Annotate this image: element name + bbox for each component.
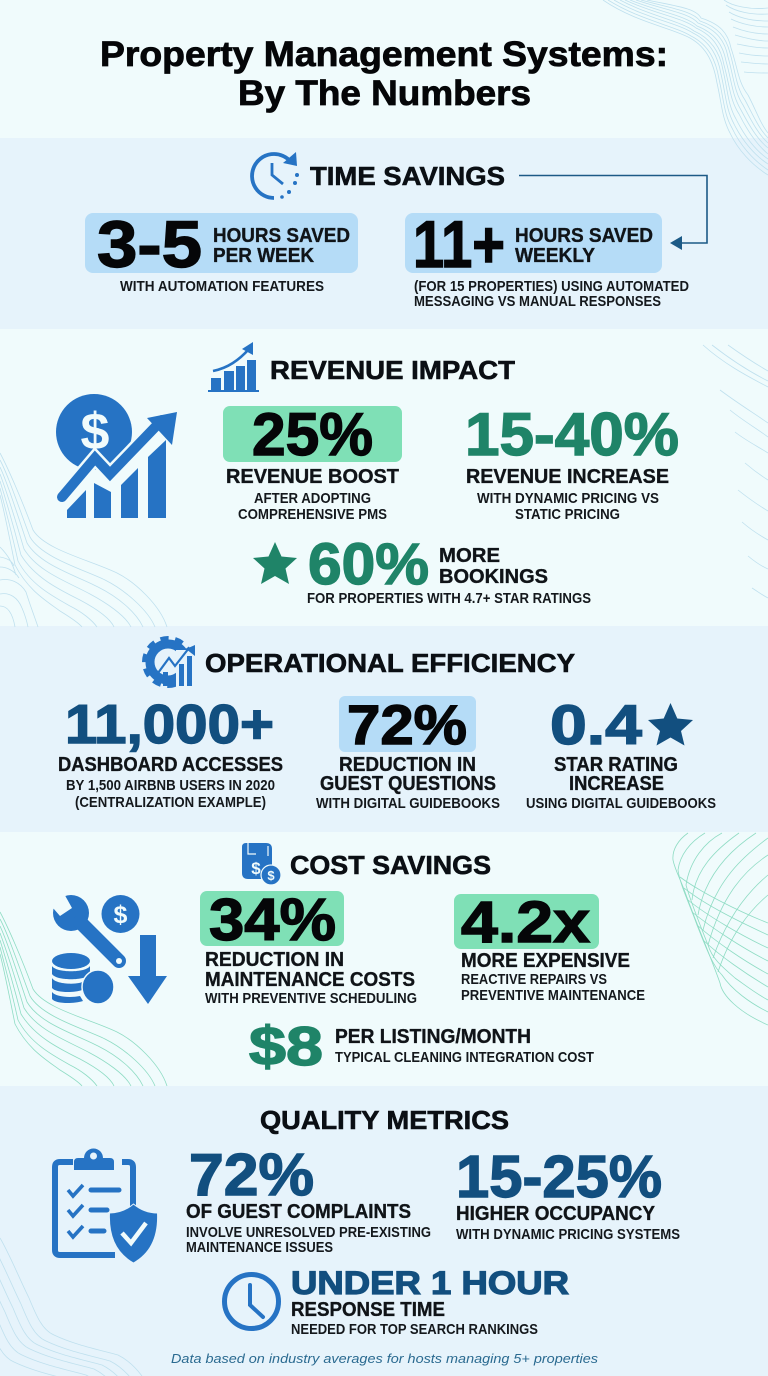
stat: 0.4 star rating increase: INCREASE: [569, 773, 664, 795]
stat: 11,000+ dashboard accesses: (CENTRALIZATION EXAMPLE): [75, 794, 266, 811]
stat: 34% reduction in maintenance costs: MAINTENANCE COSTS: [205, 969, 415, 991]
stat: 25% revenue boost: REVENUE BOOST: [226, 466, 399, 488]
arrow: heading to weekly stat: [519, 176, 707, 250]
heading: operational efficiency: OPERATIONAL EFFICIENCY: [205, 648, 575, 678]
panel: revenue impact: [56, 342, 679, 607]
stat: 0.4 star rating increase: [526, 693, 716, 812]
stat: 60% more bookings: BOOKINGS: [439, 566, 548, 588]
stat: 11,000+ dashboard accesses: DASHBOARD ACCESSES: [58, 754, 283, 776]
stat: 34% reduction in maintenance costs: 34%: [209, 887, 336, 953]
stat: 11+ hours saved: MESSAGING VS MANUAL RESPONSES: [414, 293, 661, 310]
stat: 72% of guest complaints: 72%: [189, 1142, 314, 1208]
icon: wrench, coins and down arrow: [46, 890, 167, 1004]
stat: 60% more bookings: MORE: [439, 545, 500, 567]
stat: 25% revenue boost: AFTER ADOPTING: [254, 490, 371, 507]
stat: 72% of guest complaints: MAINTENANCE ISSUES: [186, 1239, 333, 1256]
icon: clock: [224, 1274, 278, 1328]
icon: revenue chart with dollar coin: [56, 394, 177, 518]
stat: 11+ hours saved: HOURS SAVED: [515, 225, 653, 247]
stat: 72% of guest complaints: INVOLVE UNRESOLVED PRE-EXISTING: [186, 1224, 431, 1241]
stat: 15-40% revenue increase: WITH DYNAMIC PRICING VS: [477, 490, 659, 507]
stat: 4.2x more expensive: MORE EXPENSIVE: [461, 950, 630, 972]
stat: 60% more bookings: 60%: [308, 532, 429, 597]
stat: $8 per listing per month: TYPICAL CLEANING INTEGRATION COST: [335, 1049, 594, 1066]
stat: 4.2x more expensive: 4.2x: [461, 890, 590, 955]
stat: 11+ hours saved: 11+: [413, 207, 505, 281]
title: [100, 35, 668, 113]
stat: under 1 hour response time: [224, 1265, 569, 1338]
title: Property Management Systems:: [100, 35, 668, 74]
stat: 11+ hours saved: [405, 207, 689, 310]
stat: 60% more bookings: [253, 532, 591, 607]
stat: 25% revenue boost: 25%: [252, 401, 373, 468]
icon: clock with arrow: [252, 152, 299, 199]
icon: revenue chart with dollar coin: $: [81, 403, 110, 461]
stat: 4.2x more expensive: PREVENTIVE MAINTENANCE: [461, 987, 645, 1004]
panel: quality metrics: [55, 1105, 680, 1338]
heading: quality metrics: QUALITY METRICS: [260, 1105, 509, 1135]
stat: 0.4 star rating increase: STAR RATING: [554, 754, 678, 776]
stat: 11,000+ dashboard accesses: BY 1,500 AIRBNB USERS IN 2020: [66, 777, 275, 794]
stat: 11,000+ dashboard accesses: 11,000+: [65, 693, 274, 755]
stat: 34% reduction in maintenance costs: [200, 887, 417, 1007]
footer note: Data based on industry averages for hosts managing 5+ properties: [171, 1351, 599, 1366]
stat: 4.2x more expensive: REACTIVE REPAIRS VS: [461, 971, 607, 988]
heading: cost savings: COST SAVINGS: [290, 850, 491, 880]
stat: 15-25% higher occupancy: 15-25%: [456, 1144, 662, 1210]
stat: 25% revenue boost: [223, 401, 402, 523]
stat: 3-5 hours saved: 3-5: [97, 207, 202, 281]
heading: time savings: TIME SAVINGS: [310, 161, 505, 191]
stat: 0.4 star rating increase: USING DIGITAL GUIDEBOOKS: [526, 795, 716, 812]
stat: 72% of guest complaints: [186, 1142, 431, 1256]
panel: time savings: [85, 152, 707, 310]
stat: 72% reduction in guest questions: WITH DIGITAL GUIDEBOOKS: [316, 795, 500, 812]
title: By The Numbers: [238, 74, 531, 113]
stat: 72% reduction in guest questions: REDUCTION IN: [339, 754, 476, 776]
stat: 15-25% higher occupancy: [456, 1144, 680, 1243]
heading: revenue impact: REVENUE IMPACT: [270, 355, 515, 385]
stat: 34% reduction in maintenance costs: WITH PREVENTIVE SCHEDULING: [205, 990, 417, 1007]
stat: 3-5 hours saved: WITH AUTOMATION FEATURES: [120, 278, 324, 295]
stat: 15-40% revenue increase: REVENUE INCREASE: [466, 466, 669, 488]
stat: 72% reduction in guest questions: GUEST QUESTIONS: [320, 773, 496, 795]
stat: 15-25% higher occupancy: WITH DYNAMIC PRICING SYSTEMS: [456, 1226, 680, 1243]
icon: wrench, coins and down arrow: $: [114, 901, 128, 929]
icon: bill with dollar coin: $: [267, 868, 275, 883]
stat: 11+ hours saved: WEEKLY: [515, 245, 596, 267]
stat: 15-40% revenue increase: [465, 401, 679, 523]
stat: 25% revenue boost: COMPREHENSIVE PMS: [238, 506, 387, 523]
stat: $8 per listing per month: PER LISTING/MONTH: [335, 1026, 531, 1048]
stat: 3-5 hours saved: HOURS SAVED: [213, 225, 350, 247]
stat: under 1 hour response time: UNDER 1 HOUR: [291, 1265, 569, 1301]
stat: 15-40% revenue increase: 15-40%: [465, 401, 679, 468]
panel: cost savings: [46, 843, 645, 1077]
icon: clipboard with shield: [55, 1148, 158, 1263]
stat: 11+ hours saved: (FOR 15 PROPERTIES) USING AUTOMATED: [414, 278, 689, 295]
icon: gear with chart: [145, 639, 200, 688]
stat: 4.2x more expensive: [454, 890, 645, 1004]
stat: 11,000+ dashboard accesses: [58, 693, 283, 811]
icon: bill with dollar coin: $: [251, 859, 261, 878]
stat: 72% of guest complaints: OF GUEST COMPLAINTS: [186, 1201, 411, 1223]
panel: operational efficiency: [58, 639, 716, 812]
icon: small bar chart: [208, 342, 259, 392]
stat: 15-25% higher occupancy: HIGHER OCCUPANCY: [456, 1203, 656, 1225]
stat: 15-40% revenue increase: STATIC PRICING: [515, 506, 620, 523]
stat: 3-5 hours saved: PER WEEK: [213, 245, 315, 267]
stat: under 1 hour response time: NEEDED FOR TOP SEARCH RANKINGS: [291, 1321, 538, 1338]
stat: $8 per listing per month: $8: [249, 1015, 323, 1077]
icon: bill with dollar coin: [242, 843, 281, 885]
stat: $8 per listing per month: [249, 1015, 594, 1077]
stat: 60% more bookings: FOR PROPERTIES WITH 4.7+ STAR RATINGS: [307, 590, 591, 607]
stat: 34% reduction in maintenance costs: REDUCTION IN: [205, 949, 344, 971]
stat: 0.4 star rating increase: 0.4: [550, 693, 642, 756]
stat: 72% reduction in guest questions: 72%: [347, 693, 467, 756]
stat: 3-5 hours saved: [85, 207, 358, 295]
stat: under 1 hour response time: RESPONSE TIME: [291, 1299, 445, 1321]
stat: 72% reduction in guest questions: [316, 693, 500, 812]
